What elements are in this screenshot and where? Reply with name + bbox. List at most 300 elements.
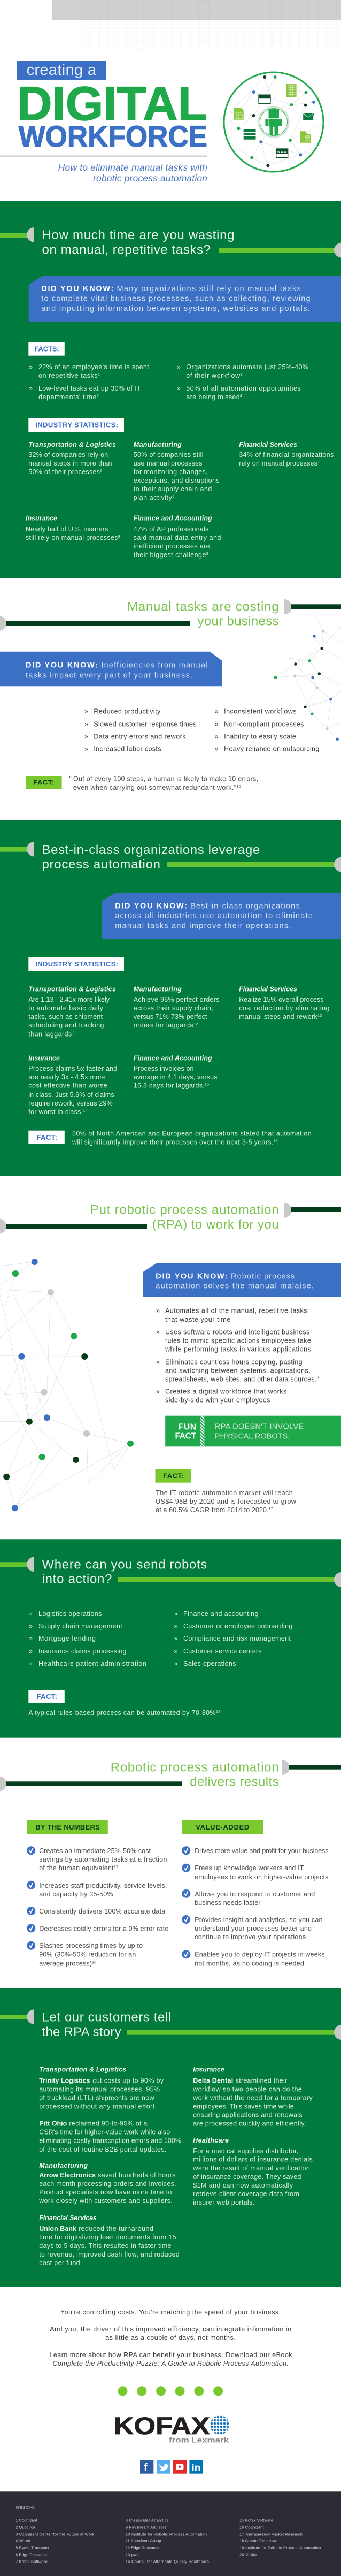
story: financial services: cost per fund. (39, 2259, 82, 2267)
statistics: finance and accounting: their biggest challenge (134, 551, 206, 559)
statistics: financial services: cost reduction by eliminating (239, 1004, 329, 1012)
statistics: transportation: 32% of companies rely on (28, 451, 108, 459)
closing text: as little as a couple of days, not months. (105, 2334, 236, 2342)
statistics: financial services: Realize 15% overall process (239, 996, 323, 1003)
did you know callout: tasks impact every part of your business. (26, 672, 192, 680)
did you know callout: DID YOU KNOW: (41, 285, 113, 293)
statistics: transportation: tasks, such as shipment (28, 1013, 103, 1020)
heading (42, 228, 234, 257)
RPA benefits list: » (156, 1307, 160, 1314)
heading: Let our customers tell (42, 2010, 171, 2025)
RPA benefits list (156, 1307, 319, 1404)
use case list: » (29, 1660, 33, 1667)
heading (90, 1203, 279, 1232)
sources column 2: 11 Aberdeen Group (126, 2538, 161, 2543)
RPA benefits list: that waste your time (165, 1316, 230, 1323)
statistics: manufacturing: for monitoring changes, (134, 468, 208, 476)
fact callout: FACT: (36, 1133, 57, 1141)
statistics: manufacturing: 6 (172, 495, 174, 499)
story: healthcare: were the result of manual verification (192, 2165, 310, 2172)
impact list: Increased labor costs (94, 745, 161, 752)
workforce: WORKFORCE (19, 119, 207, 153)
impact list: » (84, 707, 88, 715)
did you know callout: and inputting information between systems, websites and portals. (41, 304, 310, 313)
icon: document left (234, 108, 244, 120)
story: financial services (39, 2214, 180, 2267)
statistics: finance and accounting: Process invoices on (134, 1065, 194, 1072)
creating a label (17, 61, 106, 80)
sources column 2: 9 Paystream Advisors (126, 2525, 167, 2529)
by the numbers list: savings by automating tasks at a fraction (39, 1856, 167, 1863)
story: healthcare: $1M and can now automatically (193, 2182, 293, 2189)
impact list: Reduced productivity (94, 707, 161, 715)
panel: RPA delivers results (0, 1760, 341, 1967)
story: transportation and logistics: cut costs up to 90% by (92, 2077, 164, 2084)
by the numbers list: Decreases costly errors for a 0% error rate (39, 1925, 168, 1932)
by the numbers list: 90% (30%-50% reduction for an (39, 1951, 136, 1958)
statistics: insurance: Insurance (26, 515, 57, 522)
fact callout: 17 (269, 1507, 273, 1511)
statistics: transportation: 11 (72, 1032, 76, 1035)
story: manufacturing (38, 2162, 176, 2205)
story: transportation and logistics: eliminating costly transcription errors and 100% (39, 2137, 181, 2144)
fact callout: FACT: (36, 1693, 57, 1701)
use case list: » (29, 1648, 33, 1655)
statistics: insurance: are nearly 3x - 4.5x more (28, 1073, 106, 1081)
heading bars (0, 1203, 341, 1234)
story: transportation and logistics (39, 2066, 181, 2153)
story: financial services: Financial Services (39, 2214, 97, 2222)
statistics: financial services (239, 986, 329, 1020)
facts list: 4 (240, 394, 242, 398)
story: transportation and logistics: Pitt Ohio (39, 2120, 67, 2127)
heading bars (0, 599, 341, 631)
impact list: Data entry errors and rework (94, 733, 186, 740)
did you know callout: Best-in-class organizations (190, 902, 300, 911)
use case list: » (174, 1622, 177, 1630)
facts list: » (29, 363, 33, 371)
story: transportation and logistics: processed without any manual effort. (39, 2102, 157, 2110)
facts label: FACTS: (34, 345, 59, 353)
panel: cost of manual tasks (0, 599, 341, 791)
icon: document right (300, 131, 311, 143)
impact list (84, 707, 319, 752)
story: manufacturing: saved hundreds of hours (98, 2171, 175, 2179)
heading: How much time are you wasting (42, 228, 234, 242)
statistics: insurance: require rework, versus 29% (28, 1100, 113, 1107)
use case list: » (29, 1622, 33, 1630)
sources heading: SOURCES (15, 2505, 35, 2510)
icon: robot (259, 107, 289, 137)
nodes (3, 1259, 134, 1511)
value-added label (182, 1820, 263, 1834)
impact list: » (215, 707, 219, 715)
facts list: 50% of all automation opportunities (186, 385, 301, 392)
panel: put RPA to work (0, 1203, 341, 1514)
facts list: » (177, 385, 181, 392)
sources column 1: 6 Edge Research (15, 2552, 47, 2557)
value-added list: employees to work on higher-value projects (195, 1873, 328, 1881)
story: transportation and logistics: automating its manual processes. 95% (39, 2085, 160, 2093)
statistics: finance and accounting: 9 (206, 552, 208, 556)
statistics: insurance: Insurance (28, 1055, 60, 1062)
fun fact callout: RPA DOESN'T INVOLVE (215, 1423, 304, 1431)
industry statistics label: INDUSTRY STATISTICS: (35, 960, 118, 968)
icon: www window (276, 149, 288, 157)
statistics: transportation: Are 1.13 - 2.41x more likely (28, 996, 110, 1003)
heading bars (0, 1557, 341, 1587)
RPA benefits list: » (156, 1328, 160, 1336)
did you know callout: DID YOU KNOW: (26, 661, 98, 669)
icon: youtube (173, 2460, 187, 2474)
title (17, 61, 207, 153)
use case list: Healthcare patient administration (38, 1660, 146, 1667)
heading bars (0, 227, 341, 258)
fact callout: even when carrying out somewhat redundant work." (73, 784, 236, 791)
statistics: transportation: than laggards (28, 1031, 72, 1038)
statistics: transportation: Transportation & Logistics (28, 986, 116, 993)
story: transportation and logistics: CSR's time for higher-value work while also (39, 2128, 170, 2136)
statistics: insurance (28, 1055, 117, 1116)
facts list: Organizations automate just 25%-40% (186, 363, 308, 371)
did you know callout (102, 893, 341, 939)
heading bars (0, 842, 341, 872)
heading: process automation (42, 857, 160, 872)
sources column 2: 8 Clearwater Analytics (126, 2518, 169, 2522)
RPA benefits list: spreadsheets, web sites, and other data sources." (165, 1375, 319, 1383)
value-added list: understand your processes better and (195, 1925, 312, 1932)
by the numbers list: of the human equivalent (39, 1864, 114, 1872)
impact list: Non-compliant processes (224, 720, 304, 728)
RPA benefits list: » (156, 1388, 160, 1395)
heading (111, 1760, 279, 1789)
impact list: » (215, 733, 219, 740)
heading: your business (198, 614, 279, 628)
RPA benefits list: side-by-side with your employees (165, 1396, 270, 1404)
heading: on manual, repetitive tasks? (42, 242, 211, 257)
sources column 1 (15, 2518, 95, 2564)
panel: best-in-class (0, 820, 341, 1176)
industry statistics label (28, 418, 124, 432)
impact list: Heavy reliance on outsourcing (224, 745, 319, 752)
did you know callout: Robotic process (231, 1272, 294, 1281)
sources column 1: 3 Cognizant Center for the Future of Work (15, 2532, 95, 2536)
story: transportation and logistics: Transportation & Logistics (39, 2066, 126, 2074)
heading: Where can you send robots (42, 1558, 207, 1572)
sources column 3: 15 Kofax Software (239, 2518, 273, 2522)
statistics: financial services: rely on manual processes (239, 460, 317, 467)
icon: email: e (311, 111, 314, 118)
check icons: value-added (182, 1846, 190, 1958)
facts list: on repetitive tasks (38, 372, 98, 379)
story: healthcare (192, 2137, 313, 2206)
use case list: » (29, 1635, 33, 1642)
use case list: Finance and accounting (183, 1610, 258, 1618)
statistics: finance and accounting: inefficient processes are (134, 543, 210, 550)
icon: green window (244, 129, 255, 140)
RPA benefits list: rules to mimic specific actions employees take (165, 1337, 311, 1344)
fact callout (28, 1690, 220, 1717)
statistics: manufacturing: orders for laggards (134, 1022, 193, 1029)
facts list: 2 (97, 394, 99, 398)
statistics: finance and accounting: said manual data entry and (134, 534, 221, 542)
sources column 1: 7 Kofax Software (15, 2559, 48, 2564)
sources column 1: 1 Cognizant (15, 2518, 37, 2522)
fact callout: Out of every 100 steps, a human is likely to make 10 errors, (73, 775, 258, 782)
closing text: And you, the driver of this improved efficiency, can integrate information in (50, 2326, 291, 2333)
story: insurance: work without the need for a temporary (192, 2094, 313, 2101)
fact callout: FACT: (163, 1472, 184, 1480)
by the numbers label: BY THE NUMBERS (35, 1823, 100, 1831)
fun fact callout: FACT (175, 1431, 197, 1441)
statistics: insurance: 8 (118, 535, 120, 539)
logo: Kofax from Lexmark (115, 2415, 229, 2442)
closing text (49, 2308, 292, 2367)
heading (42, 843, 260, 872)
statistics: manufacturing: plan activity (134, 494, 172, 501)
heading (42, 1558, 207, 1587)
value-added list: Frees up knowledge workers and IT (195, 1864, 304, 1872)
statistics: financial services: 13 (317, 1014, 322, 1018)
story: financial services: to revenue, improved cash flow, and reduced (39, 2251, 180, 2258)
illustration: robot in network circle (224, 72, 323, 172)
facts list: 22% of an employee's time is spent (38, 363, 149, 371)
fact callout (28, 1130, 312, 1146)
icon: twitter (157, 2460, 170, 2474)
by the numbers list (39, 1847, 168, 1967)
statistics: insurance: for worst in class. (28, 1108, 83, 1116)
sources column 3: 16 Cognizant (239, 2525, 264, 2529)
story: insurance: workflow so two people can do the (192, 2085, 302, 2093)
use case list: Logistics operations (38, 1610, 102, 1618)
facts list: » (29, 385, 33, 392)
heading bars (0, 1760, 341, 1792)
impact list: » (84, 720, 88, 728)
statistics: financial services: 7 (317, 461, 320, 464)
icon: www window: www (277, 150, 286, 154)
statistics: manufacturing (134, 441, 219, 501)
by the numbers label (27, 1820, 108, 1834)
icon: facebook: f (144, 2462, 148, 2474)
statistics: insurance (26, 515, 120, 542)
story: insurance (192, 2066, 313, 2127)
impact list: Inconsistent workflows (224, 707, 297, 715)
story: healthcare: millions of dollars of insurance denials (193, 2155, 313, 2163)
statistics: finance and accounting: Finance and Accounting (134, 515, 212, 522)
icon: spreadsheet (286, 84, 297, 97)
heading (127, 600, 279, 628)
use case list: Supply chain management (38, 1622, 122, 1630)
statistics: financial services: manual steps and rework (239, 1013, 317, 1020)
subtitle: How to eliminate manual tasks with (58, 162, 207, 173)
heading: (RPA) to work for you (152, 1217, 279, 1232)
story: healthcare: of insurance coverage. They saved (193, 2173, 301, 2181)
sources column 3 (239, 2518, 321, 2557)
did you know callout: to complete vital business processes, such as collecting, reviewing (41, 294, 311, 303)
RPA benefits list: » (156, 1358, 160, 1366)
by the numbers list: Creates an immediate 25%-50% cost (39, 1847, 151, 1855)
value-added list: Drives more value and profit for your business (195, 1847, 328, 1855)
heading: Robotic process automation (111, 1760, 279, 1775)
sources column 1: 5 EyeforTransport (15, 2545, 49, 2550)
icon: linkedin: in (191, 2463, 200, 2474)
sources column 3: 18 Create Tomorrow (239, 2538, 277, 2543)
statistics: manufacturing: versus 71%-73% perfect (134, 1013, 207, 1020)
statistics: manufacturing: 12 (193, 1023, 198, 1026)
panel: wasted time (0, 201, 341, 578)
value-added label: VALUE-ADDED (196, 1823, 249, 1831)
creating a label: creating a (27, 62, 97, 79)
value-added list: Allows you to respond to customer and (195, 1891, 315, 1898)
facts list: of their workflow (186, 372, 240, 379)
statistics: financial services (239, 441, 334, 467)
subtitle: robotic process automation (93, 173, 207, 184)
network decoration (274, 615, 341, 741)
by the numbers list: Consistently delivers 100% accurate data (39, 1908, 165, 1915)
value-added list: Enables you to deploy IT projects in weeks, (195, 1951, 327, 1958)
icon: window (259, 95, 270, 104)
RPA benefits list: Automates all of the manual, repetitive tasks (165, 1307, 307, 1314)
story: financial services: reduced the turnaround (79, 2225, 153, 2232)
story: financial services: time for digitalizing loan documents from 15 (39, 2234, 176, 2241)
story: manufacturing: Arrow Electronics (39, 2171, 96, 2179)
by the numbers list: and capacity by 35-50% (39, 1891, 113, 1898)
story: transportation and logistics: of the cost of routine B2B portal updates. (39, 2146, 166, 2153)
story: healthcare: retrieve client coverage data from (193, 2190, 299, 2198)
dot divider (118, 2386, 223, 2396)
statistics: finance and accounting: Finance and Accounting (134, 1055, 212, 1062)
fact callout: US$4.98B by 2020 and is forecasted to grow (156, 1498, 297, 1505)
did you know callout: across all industries use automation to eliminate (115, 912, 313, 920)
use case list: » (174, 1660, 177, 1667)
closing text: Complete the Productivity Puzzle: A Guide to Robotic Process Automation. (52, 2360, 289, 2367)
story: transportation and logistics: reclaimed 90-to-95% of a (69, 2120, 148, 2127)
statistics: manufacturing: Manufacturing (134, 986, 182, 993)
statistics: manufacturing: Manufacturing (134, 441, 182, 448)
statistics: transportation: 5 (100, 469, 102, 473)
statistics: transportation: to automate basic daily (28, 1004, 104, 1012)
statistics: manufacturing: to their supply chain and (134, 485, 212, 493)
statistics: finance and accounting: 47% of AP professionals (134, 525, 208, 533)
network decoration (0, 1259, 134, 1511)
impact list: » (215, 745, 219, 752)
panel: sources (0, 2491, 341, 2576)
statistics: insurance: still rely on manual processes (26, 534, 118, 542)
impact list: » (215, 720, 219, 728)
heading: Put robotic process automation (90, 1203, 279, 1217)
did you know callout (29, 276, 341, 322)
story: healthcare: insurer web portals. (193, 2199, 254, 2206)
story: transportation and logistics: Trinity Logistics (39, 2077, 90, 2084)
story: insurance: employees. This saves time while (193, 2102, 294, 2110)
statistics: transportation (28, 441, 116, 476)
heading: the RPA story (42, 2025, 121, 2039)
heading (42, 2010, 171, 2039)
RPA benefits list: Uses software robots and intelligent business (165, 1328, 309, 1336)
statistics: insurance: cost effective than worse (28, 1082, 107, 1089)
fact callout: 18 (216, 1710, 220, 1714)
story: insurance: Delta Dental (193, 2077, 233, 2084)
statistics: transportation (28, 986, 116, 1038)
statistics: financial services: Financial Services (239, 441, 297, 448)
facts label (28, 342, 65, 356)
story: insurance: Insurance (193, 2066, 224, 2074)
value-added list (195, 1847, 328, 1967)
statistics: transportation: 50% of their processes (28, 468, 100, 476)
sources column 3: 17 Transparency Market Research (239, 2532, 303, 2536)
heading: delivers results (190, 1774, 279, 1789)
icon: email (303, 111, 314, 120)
story: manufacturing: Product specialists now have more time to (39, 2189, 172, 2196)
fact callout: 10 (237, 785, 241, 789)
subtitle (58, 162, 207, 184)
fact callout: The IT robotic automation market will reach (156, 1489, 293, 1497)
statistics: transportation: Transportation & Logistics (28, 441, 116, 448)
fact callout (26, 775, 258, 791)
story: transportation and logistics: of truckload (LTL) shipments are now (39, 2094, 154, 2101)
story: healthcare: Healthcare (193, 2137, 229, 2144)
fact callout: will significantly improve their processes over the next 3-5 years. (72, 1139, 273, 1146)
value-added list: continue to improve your operations (195, 1933, 306, 1941)
fact callout: " (69, 775, 72, 782)
story: financial services: days to 5 days. This resulted in faster time (39, 2242, 172, 2250)
social icons (140, 2460, 203, 2474)
story: manufacturing: Manufacturing (39, 2162, 88, 2169)
statistics: manufacturing: 50% of companies still (134, 451, 203, 459)
did you know callout: DID YOU KNOW: (115, 902, 187, 911)
statistics: finance and accounting: 16.3 days for laggards. (134, 1082, 205, 1089)
value-added list: Provides insight and analytics, so you can (195, 1916, 322, 1924)
RPA benefits list: and switching between systems, applications, (165, 1367, 311, 1374)
value-added list: business needs faster (195, 1899, 260, 1907)
network nodes (237, 75, 315, 167)
statistics: insurance: 14 (83, 1109, 88, 1113)
panel: customer stories (0, 1988, 341, 2287)
logo: Kofax from Lexmark: KOFAX (114, 2412, 210, 2440)
fact callout: 16 (273, 1140, 278, 1144)
use case list: » (174, 1648, 177, 1655)
fact callout: 50% of North American and European organizations stated that automation (72, 1130, 312, 1138)
impact list: » (84, 745, 88, 752)
sources column 1: 2 Quocirca (15, 2525, 36, 2529)
statistics: insurance: in class. Just 5.6% of claims (28, 1091, 114, 1099)
use case list: Sales operations (183, 1660, 236, 1667)
sources column 2: 13 pwc (126, 2552, 139, 2557)
digital: DIGITAL (17, 77, 207, 130)
industry statistics label: INDUSTRY STATISTICS: (35, 421, 118, 429)
use case list: Mortgage lending (38, 1635, 96, 1642)
fun fact callout (165, 1416, 341, 1446)
statistics: manufacturing: exceptions, and disruptions (134, 477, 219, 484)
statistics: insurance: Nearly half of U.S. insurers (26, 525, 108, 533)
use case list (29, 1610, 292, 1667)
logo: Kofax from Lexmark: from Lexmark (169, 2436, 229, 2444)
check icons: by the numbers (27, 1846, 35, 1950)
panel: where to send robots (0, 1539, 341, 1738)
by the numbers list: Increases staff productivity, service levels, (39, 1882, 167, 1889)
facts list: 3 (241, 373, 243, 377)
sources column 2: 12 Edge Research (126, 2545, 159, 2550)
fact callout: FACT: (33, 779, 54, 787)
statistics: manufacturing: across their supply chain, (134, 1004, 213, 1012)
fun fact callout: FUN (179, 1423, 196, 1432)
did you know callout: automation solves the manual malaise. (156, 1282, 314, 1291)
impact list: » (84, 733, 88, 740)
use case list: Customer service centers (183, 1648, 262, 1655)
facts list: 1 (98, 373, 100, 377)
story: manufacturing: work closely with customers and suppliers. (38, 2197, 173, 2205)
value-added list: not months, as no coding is needed (195, 1960, 304, 1967)
